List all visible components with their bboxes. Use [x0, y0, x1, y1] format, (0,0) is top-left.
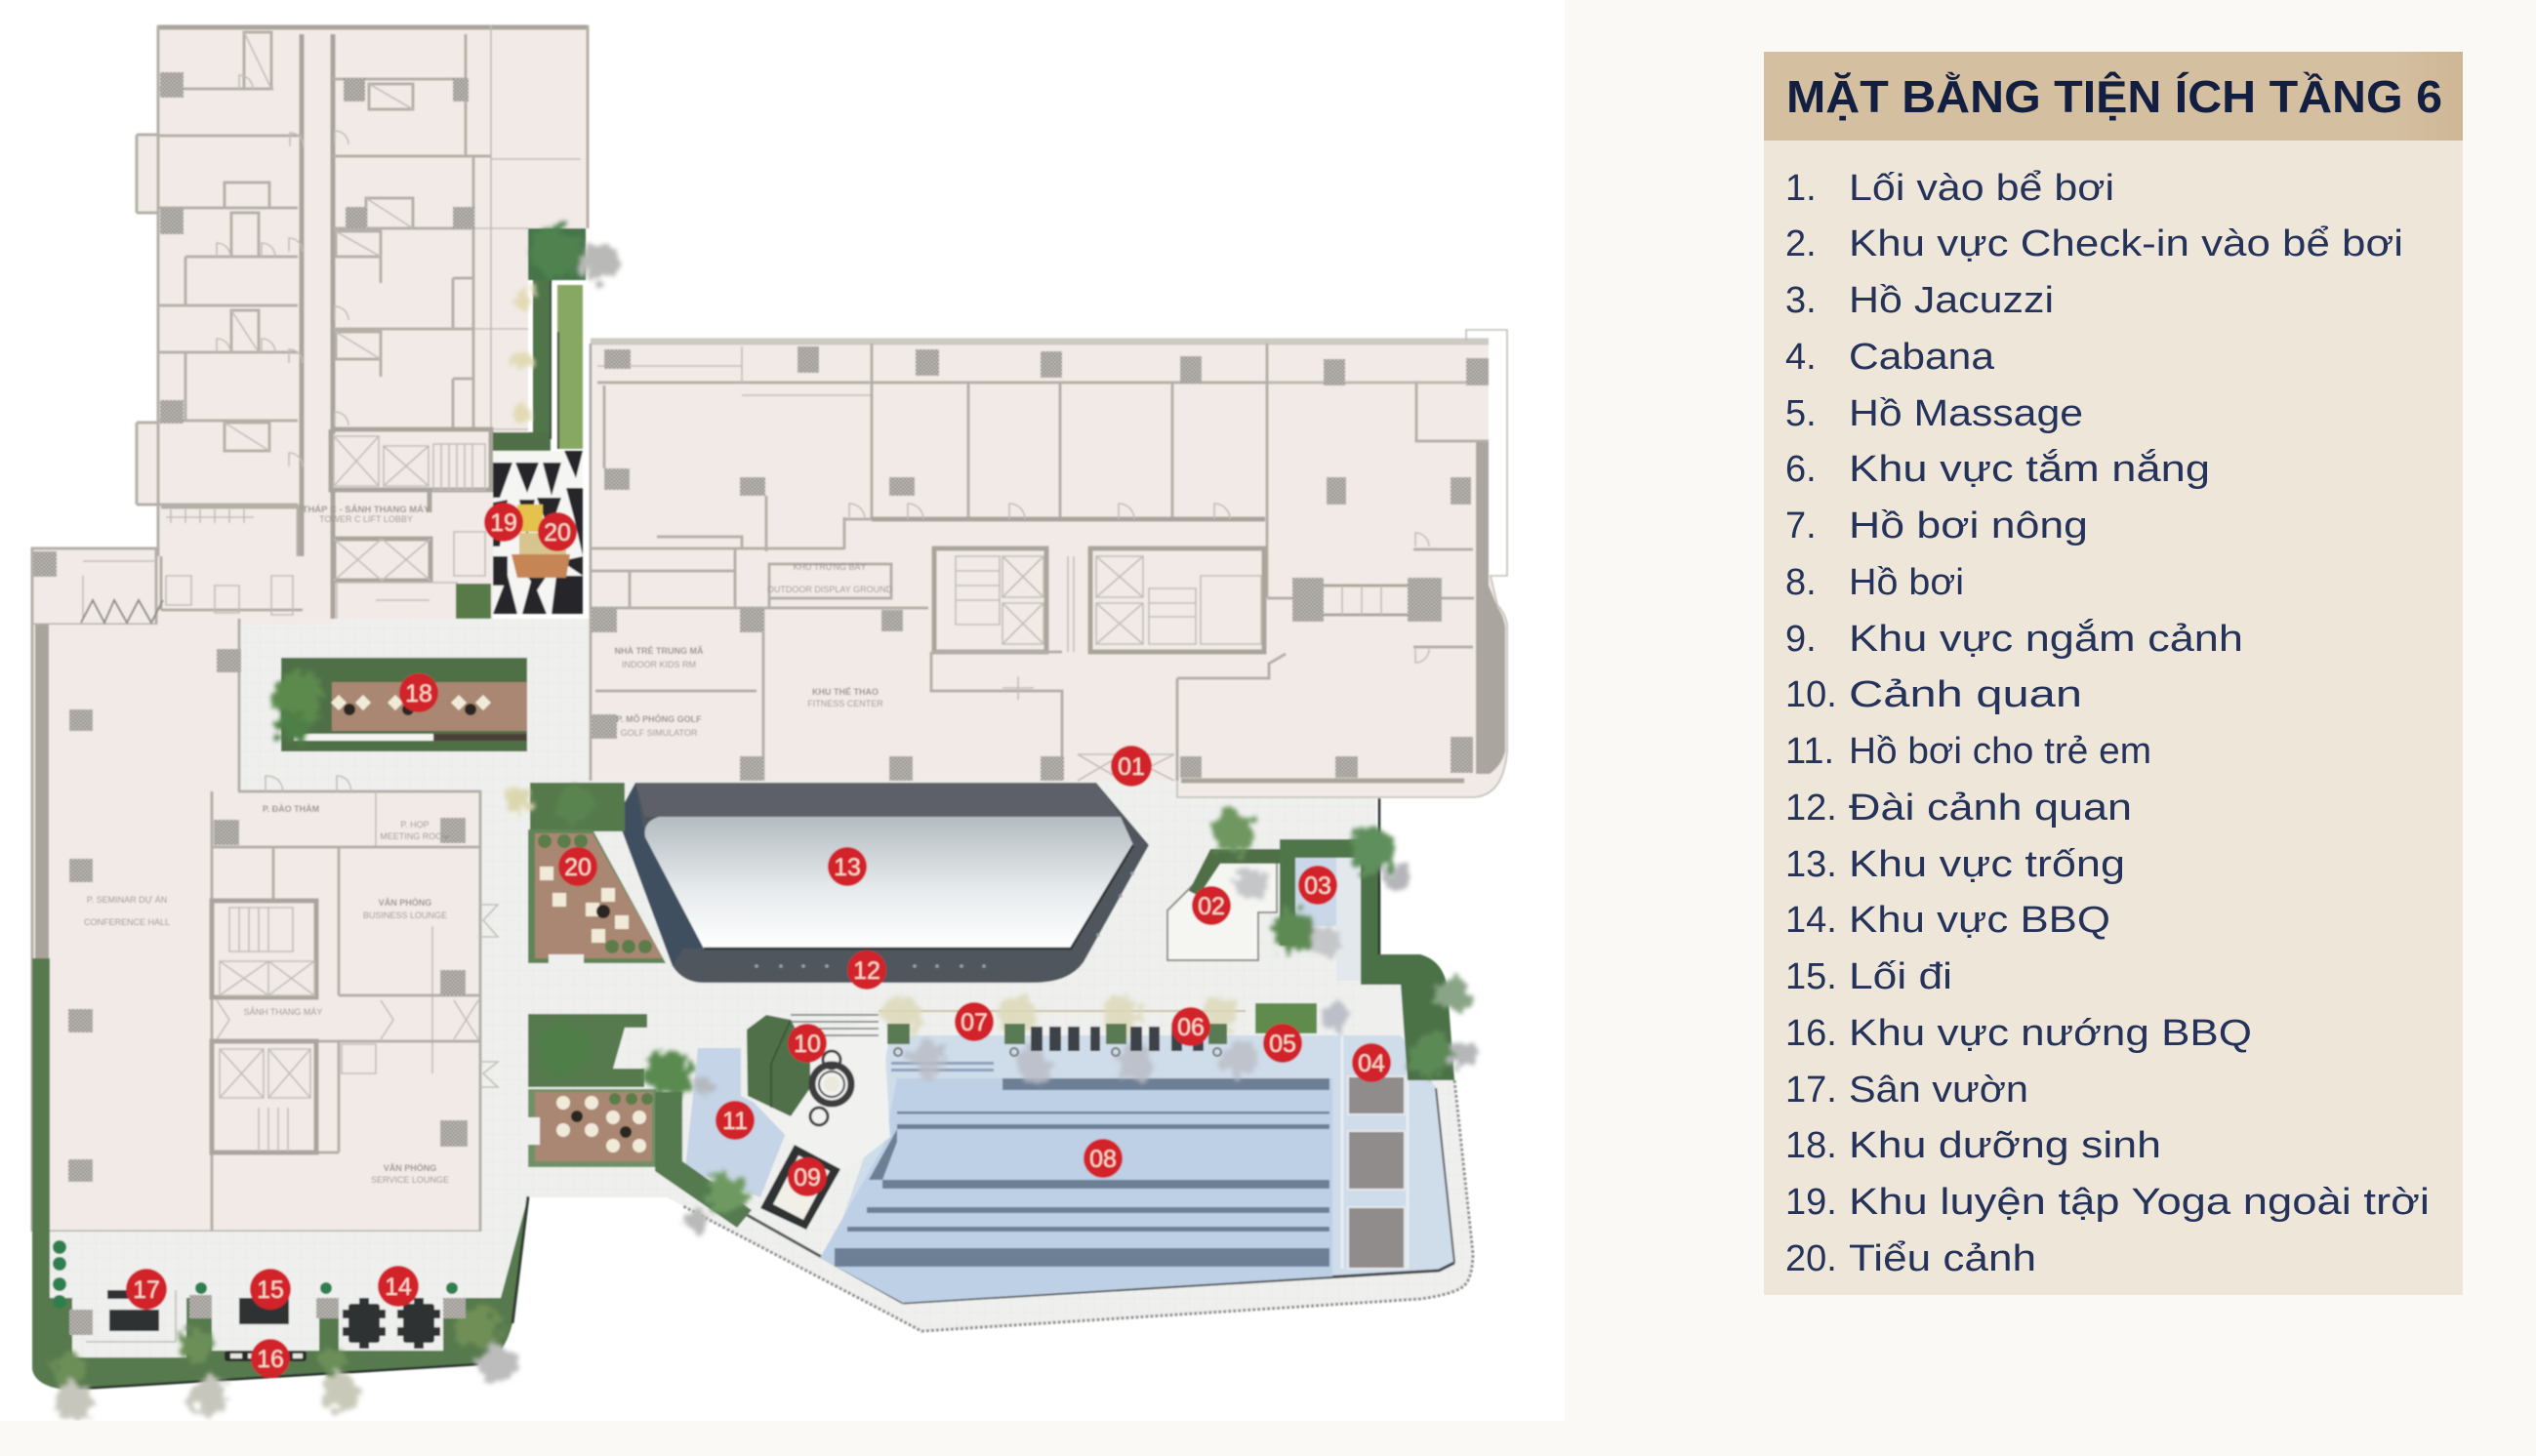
legend list: 11. [1785, 731, 1834, 772]
legend list: Khu vực tắm nắng [1849, 448, 2210, 490]
heading bar [1764, 52, 2463, 141]
legend list: 12. [1785, 788, 1837, 829]
legend list: 18. [1785, 1125, 1837, 1166]
badge 10 [788, 1024, 827, 1063]
label: room names conference block: P. SEMINAR DỰ ÁN [87, 895, 167, 905]
legend list: Lối đi [1849, 956, 1952, 997]
badge 06 [1171, 1007, 1210, 1046]
legend list: Hồ bơi cho trẻ em [1849, 731, 2151, 772]
legend list: Khu luyện tập Yoga ngoài trời [1849, 1182, 2430, 1223]
pool: children's pool 11 and planter [655, 1048, 791, 1234]
label: room names east block [615, 562, 893, 738]
legend list [1785, 168, 2430, 1279]
badge 02 [1192, 886, 1231, 925]
label: room names east block: NHÀ TRẺ TRUNG MÃ [615, 645, 704, 656]
label: room names conference block: BUSINESS LOUNGE [363, 910, 447, 920]
badge 17: 17 [133, 1276, 160, 1304]
badge 08 [1084, 1139, 1123, 1178]
label: room names conference block: SERVICE LOUNGE [371, 1175, 449, 1185]
building: north tower [32, 25, 588, 625]
label: room names east block: KHU THỂ THAO [812, 686, 879, 697]
legend list: 5. [1785, 393, 1817, 434]
badge 14: 14 [385, 1274, 412, 1301]
garden: wellness deck 18 [272, 658, 527, 751]
pond: void and viewing band 13 [617, 783, 1149, 983]
badge 15: 15 [257, 1276, 284, 1304]
legend list: 1. [1785, 168, 1817, 209]
legend list: Tiểu cảnh [1849, 1238, 2036, 1279]
legend list: 9. [1785, 619, 1817, 660]
badge 06: 06 [1177, 1014, 1205, 1041]
label: room names conference block: P. ĐÀO THẢM [263, 803, 319, 814]
legend list: 7. [1785, 506, 1817, 546]
legend list: Khu vực Check-in vào bể bơi [1849, 223, 2403, 264]
label: room names conference block [84, 803, 450, 1185]
heading bar: MẶT BẰNG TIỆN ÍCH TẦNG 6 [1786, 71, 2442, 122]
badge 09 [788, 1157, 827, 1196]
legend list: 14. [1785, 900, 1837, 941]
label: Tower C lift lobby: THÁP C - SẢNH THANG MÁY [303, 504, 430, 515]
label: room names conference block: SẢNH THANG MÁY [244, 1006, 322, 1017]
badge 18 [399, 673, 438, 712]
label: room names conference block: MEETING ROOM [380, 831, 450, 841]
door arcs tower [217, 32, 413, 466]
planters and loungers: sunbathing row 06 07 [879, 995, 1257, 1081]
badge 19: 19 [490, 509, 517, 537]
badge 03: 03 [1304, 872, 1331, 900]
legend list: Hồ Massage [1849, 393, 2083, 434]
badge 09: 09 [794, 1164, 821, 1192]
garden: south BBQ zone [32, 958, 528, 1421]
legend list: 17. [1785, 1070, 1837, 1111]
badge 07: 07 [961, 1009, 988, 1036]
badge 10: 10 [794, 1031, 821, 1058]
legend list: Hồ bơi nông [1849, 506, 2088, 546]
badge 11 [716, 1101, 755, 1140]
label: room names east block: P. MÔ PHỎNG GOLF [616, 713, 702, 724]
marker badges [126, 503, 1391, 1378]
garden: terrace lower [528, 1014, 692, 1167]
legend list: Cabana [1849, 337, 1995, 378]
badge 19 [484, 503, 523, 542]
planters: massage pool 05 [1255, 991, 1408, 1033]
legend list: Hồ bơi [1849, 562, 1964, 603]
badge 16: 16 [257, 1346, 284, 1373]
pool: deck and water 08 [695, 1034, 1454, 1303]
badge 07 [955, 1002, 994, 1041]
badge 14 [378, 1266, 419, 1307]
check-in zone 02 and jacuzzi 03 [1167, 798, 1478, 1080]
pool: viewing deck 09 and fountain [747, 1011, 890, 1230]
label: room names conference block: P. HỌP [400, 820, 429, 829]
legend list: Hồ Jacuzzi [1849, 280, 2054, 321]
legend list: 20. [1785, 1238, 1837, 1279]
legend list: 2. [1785, 223, 1817, 264]
legend list: 8. [1785, 562, 1817, 603]
label: Tower C lift lobby [303, 504, 430, 524]
legend list: Khu vực trống [1849, 844, 2125, 885]
legend list: Đài cảnh quan [1849, 788, 2132, 829]
badge 12 [847, 950, 886, 990]
building: east block [591, 330, 1507, 797]
legend list: Khu vực nướng BBQ [1849, 1013, 2252, 1054]
legend list: 6. [1785, 449, 1817, 490]
panel: amenities legend [1764, 52, 2463, 1295]
badge 01: 01 [1118, 753, 1145, 781]
legend list: 4. [1785, 337, 1817, 378]
badge 13 [828, 847, 867, 886]
badge 08: 08 [1089, 1146, 1117, 1173]
badge 13: 13 [834, 854, 861, 881]
badge 11: 11 [722, 1108, 748, 1135]
legend list: 3. [1785, 280, 1817, 321]
icon: yoga deck triangle pattern [456, 451, 583, 619]
label: room names conference block: VĂN PHÒNG [379, 897, 431, 908]
badge 01 [1111, 746, 1152, 787]
badge 15 [250, 1269, 291, 1310]
garden: terrace 20 south [505, 783, 666, 964]
badge 05 [1263, 1024, 1302, 1063]
label: room names east block: OUTDOOR DISPLAY GROUND [767, 585, 893, 594]
door arcs east [849, 504, 1429, 663]
panel: white plan background [0, 0, 1565, 1421]
badge 17 [126, 1269, 167, 1310]
legend list: Lối vào bể bơi [1849, 168, 2114, 209]
legend list: Sân vườn [1849, 1070, 2028, 1111]
paving terraces [32, 619, 1473, 1390]
legend list: 13. [1785, 844, 1837, 885]
badge 20 north [538, 512, 577, 551]
badge 18: 18 [405, 680, 432, 708]
label: room names east block: FITNESS CENTER [807, 699, 883, 708]
furniture: BBQ tables and counters [86, 1290, 440, 1361]
legend list: Cảnh quan [1849, 674, 2082, 715]
badge 04 [1352, 1043, 1391, 1082]
badge 05: 05 [1269, 1031, 1296, 1058]
badge 20 south: 20 [564, 854, 592, 881]
legend list: 16. [1785, 1013, 1837, 1054]
label: room names east block: KHU TRƯNG BÀY [793, 562, 867, 572]
legend list: 10. [1785, 674, 1837, 715]
legend list: Khu vực BBQ [1849, 900, 2110, 941]
floor plan [32, 25, 1507, 1421]
label: room names east block: INDOOR KIDS RM [622, 660, 696, 669]
badge 16 [251, 1339, 290, 1378]
badge 04: 04 [1358, 1050, 1385, 1077]
legend list: 19. [1785, 1182, 1837, 1223]
label: Tower C lift lobby: TOWER C LIFT LOBBY [319, 514, 413, 524]
badge 02: 02 [1198, 893, 1225, 920]
planter: tower garden strip [493, 226, 620, 451]
badge 20 south [558, 847, 597, 886]
badge 20 north: 20 [544, 519, 571, 546]
legend list: Khu dưỡng sinh [1849, 1125, 2161, 1166]
legend list: 15. [1785, 956, 1837, 997]
label: room names east block: GOLF SIMULATOR [621, 728, 698, 738]
cabanas 04 [1342, 1034, 1408, 1269]
legend list: Khu vực ngắm cảnh [1849, 618, 2243, 660]
badge 03 [1298, 866, 1337, 905]
badge 12: 12 [853, 957, 880, 985]
label: room names conference block: VĂN PHÒNG [384, 1162, 436, 1173]
label: room names conference block: CONFERENCE HALL [84, 917, 170, 927]
building: conference block [32, 548, 498, 1248]
